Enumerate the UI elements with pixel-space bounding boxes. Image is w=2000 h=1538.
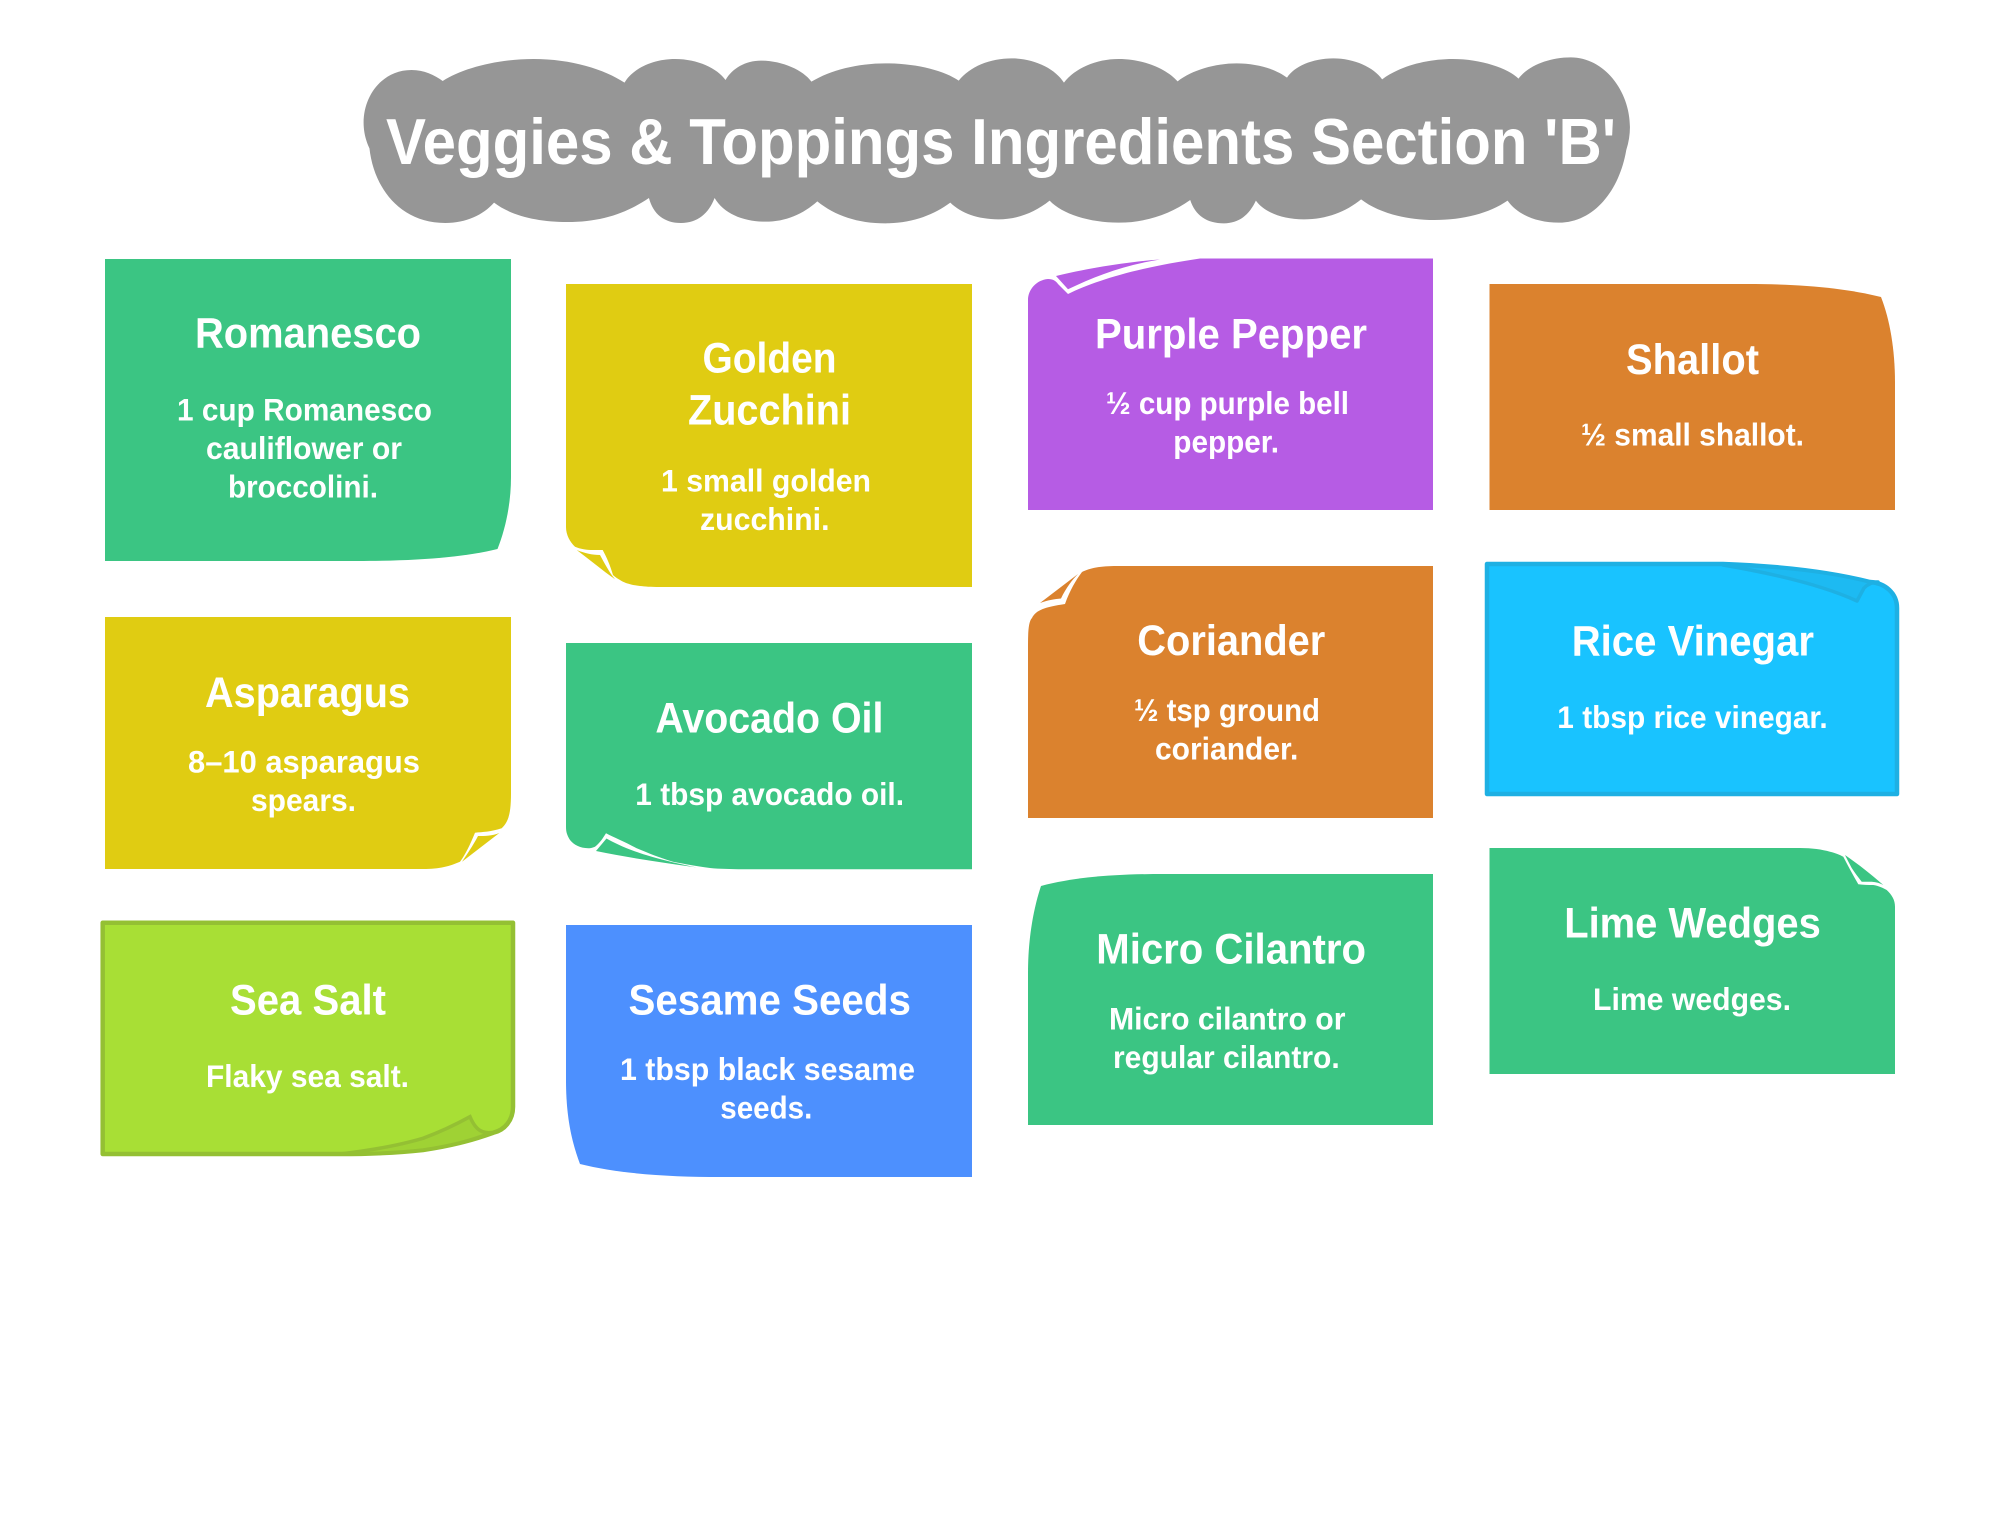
heading: Micro Cilantro bbox=[1096, 925, 1366, 973]
description: 1 tbsp rice vinegar. bbox=[1557, 699, 1828, 735]
panel: Micro Cilantro bbox=[1028, 874, 1433, 1125]
note shape bbox=[1028, 874, 1433, 1125]
description: 1 tbsp avocado oil. bbox=[635, 776, 904, 812]
page curl bbox=[577, 550, 615, 579]
heading: Avocado Oil bbox=[655, 694, 883, 742]
heading: Asparagus bbox=[205, 669, 410, 717]
description: ½ small shallot. bbox=[1581, 417, 1804, 453]
heading: Golden bbox=[702, 334, 836, 382]
description: spears. bbox=[251, 782, 356, 818]
page curl bbox=[1723, 565, 1878, 601]
panel: Golden Zucchini bbox=[566, 284, 972, 587]
description bbox=[1134, 692, 1320, 767]
panel: Shallot bbox=[1490, 284, 1895, 510]
page curl bbox=[1056, 260, 1160, 289]
heading: Coriander bbox=[1137, 617, 1326, 665]
panel: Coriander bbox=[1028, 566, 1433, 818]
note shape bbox=[1028, 566, 1433, 818]
description: Flaky sea salt. bbox=[206, 1058, 409, 1094]
panel: Asparagus bbox=[105, 617, 511, 869]
description bbox=[1106, 385, 1349, 459]
description: 1 cup Romanesco bbox=[177, 392, 432, 428]
description: pepper. bbox=[1173, 423, 1279, 459]
cloud shape bbox=[364, 57, 1630, 223]
note shape bbox=[566, 925, 972, 1177]
panel: Romanesco bbox=[105, 259, 511, 561]
description: 1 tbsp black sesame bbox=[620, 1051, 915, 1087]
description: Lime wedges. bbox=[1593, 981, 1791, 1017]
description: 8–10 asparagus bbox=[188, 743, 420, 779]
heading: Sesame Seeds bbox=[628, 976, 911, 1024]
note shape bbox=[1490, 284, 1895, 510]
note shape bbox=[1028, 258, 1433, 510]
note shape bbox=[105, 617, 511, 869]
panel: Avocado Oil bbox=[566, 643, 972, 869]
note shape bbox=[566, 643, 972, 869]
heading bbox=[688, 334, 851, 435]
page curl bbox=[462, 833, 499, 862]
description bbox=[188, 743, 420, 818]
description bbox=[177, 392, 432, 504]
description: ½ cup purple bell bbox=[1106, 385, 1349, 421]
note shape bbox=[103, 923, 513, 1154]
heading: Sea Salt bbox=[230, 976, 386, 1024]
description: cauliflower or bbox=[206, 430, 402, 466]
description: regular cilantro. bbox=[1113, 1039, 1340, 1075]
title banner bbox=[364, 57, 1630, 223]
page curl bbox=[1040, 574, 1078, 603]
heading: Shallot bbox=[1626, 336, 1759, 384]
panel: Sea Salt bbox=[103, 923, 513, 1154]
note shape bbox=[1490, 848, 1895, 1074]
page curl bbox=[1845, 855, 1883, 885]
heading: Romanesco bbox=[195, 310, 421, 358]
heading: Rice Vinegar bbox=[1572, 618, 1814, 666]
note shape bbox=[566, 284, 972, 587]
panel: Lime Wedges bbox=[1490, 848, 1895, 1074]
page curl bbox=[340, 1117, 492, 1154]
description bbox=[661, 463, 871, 537]
panel: Purple Pepper bbox=[1028, 258, 1433, 510]
page curl bbox=[596, 838, 697, 868]
description: ½ tsp ground bbox=[1134, 692, 1320, 728]
title text: Veggies & Toppings Ingredients Section 'B' bbox=[386, 105, 1616, 178]
heading: Purple Pepper bbox=[1095, 310, 1367, 358]
panel: Sesame Seeds bbox=[566, 925, 972, 1177]
description: Micro cilantro or bbox=[1109, 1000, 1346, 1036]
heading: Lime Wedges bbox=[1564, 899, 1821, 947]
heading: Zucchini bbox=[688, 387, 851, 435]
description bbox=[1109, 1000, 1346, 1075]
description: 1 small golden bbox=[661, 463, 871, 499]
description: broccolini. bbox=[228, 468, 378, 504]
panel: Rice Vinegar bbox=[1487, 564, 1897, 794]
description: seeds. bbox=[720, 1090, 812, 1126]
description bbox=[620, 1051, 915, 1126]
description: zucchini. bbox=[700, 501, 830, 537]
description: coriander. bbox=[1155, 731, 1298, 767]
note shape bbox=[105, 259, 511, 561]
note shape bbox=[1487, 564, 1897, 794]
